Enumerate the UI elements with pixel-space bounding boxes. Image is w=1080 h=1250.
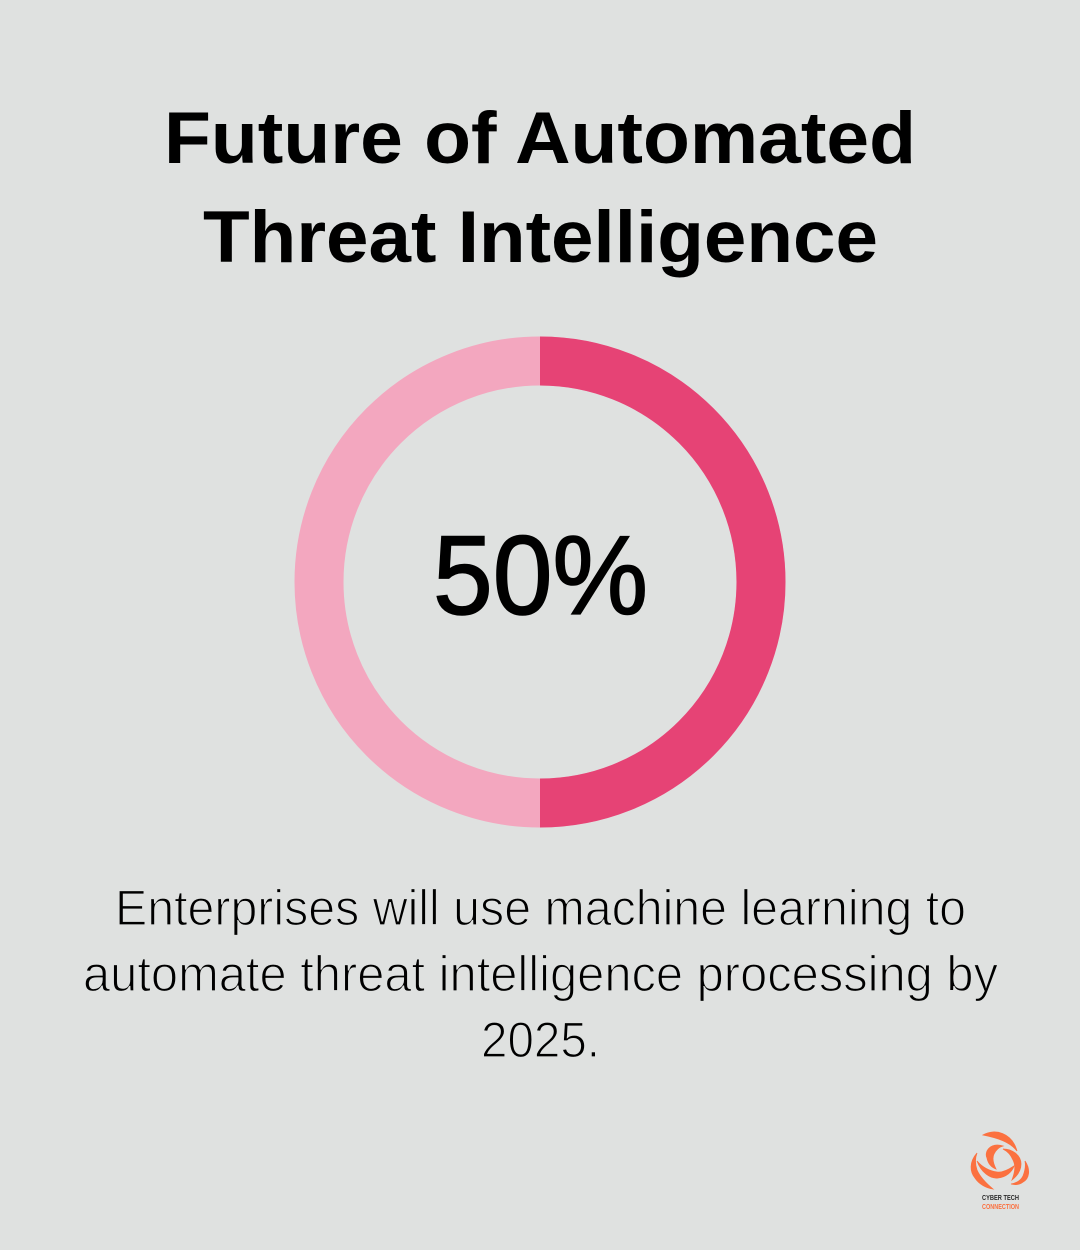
logo wordmark: CYBER TECH	[982, 1193, 1019, 1202]
description text: 2025.	[481, 1012, 600, 1068]
icon: tri-blade swirl	[971, 1132, 1029, 1189]
logo wordmark: CONNECTION	[982, 1202, 1019, 1211]
description text: automate threat intelligence processing by	[83, 946, 998, 1002]
description text	[83, 880, 998, 1068]
title	[164, 98, 916, 278]
donut value: 50%	[433, 513, 648, 638]
title: Threat Intelligence	[203, 197, 878, 278]
description text: Enterprises will use machine learning to	[115, 880, 966, 936]
title: Future of Automated	[164, 98, 916, 179]
donut chart: 50%	[319, 361, 761, 803]
logo wordmark	[982, 1193, 1019, 1211]
logo: Cyber Tech Connection	[971, 1132, 1029, 1211]
